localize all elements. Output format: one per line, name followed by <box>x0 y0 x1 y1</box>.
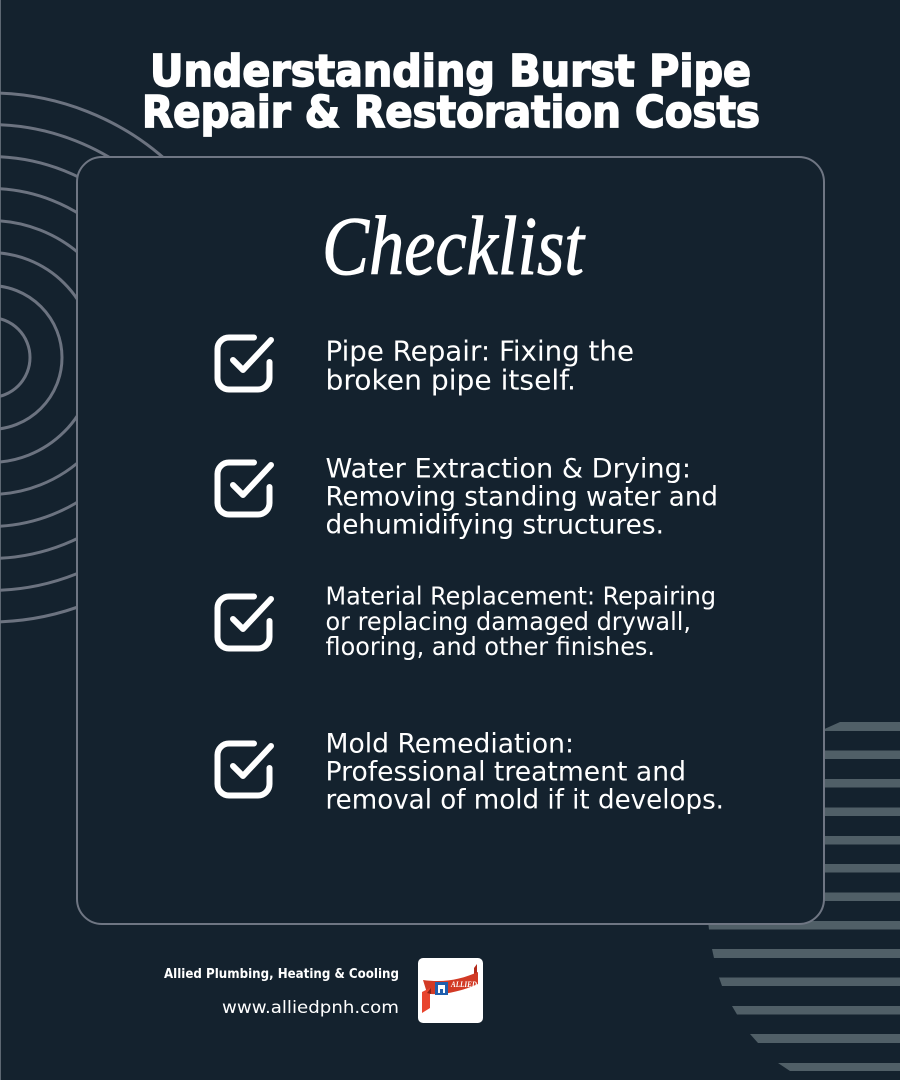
icon: company logo <box>418 958 483 1023</box>
panel: checklist <box>77 157 824 924</box>
text: material replacement: flooring, and other finishes. <box>326 632 655 661</box>
text: pipe repair: Pipe Repair: Fixing the <box>326 334 634 368</box>
text: pipe repair <box>326 334 634 396</box>
icon: checkbox <box>218 596 271 648</box>
text: water extraction: dehumidifying structures. <box>326 510 664 540</box>
text: water extraction <box>326 454 718 540</box>
icon: checkbox <box>218 744 271 796</box>
title <box>142 46 760 138</box>
text: material replacement: or replacing damaged drywall, <box>326 607 691 636</box>
text: material replacement <box>326 582 716 661</box>
heading: Checklist: Checklist <box>322 200 586 293</box>
text: mold remediation: removal of mold if it develops. <box>326 784 724 816</box>
icon: checkbox <box>218 338 271 390</box>
icon: company logo: ALLIED <box>450 979 477 989</box>
icon: checkbox <box>218 462 271 514</box>
checklist item 3 <box>218 582 716 661</box>
decorative concentric arcs <box>0 93 254 622</box>
text: water extraction: Removing standing water and <box>326 482 718 512</box>
checklist item 1 <box>218 334 634 396</box>
decorative striped circle <box>708 722 900 1071</box>
text: material replacement: Material Replacement: Repairing <box>326 582 716 610</box>
title: Understanding Burst Pipe <box>150 46 751 97</box>
text: mold remediation: Mold Remediation: <box>326 728 574 760</box>
footer: company name: Allied Plumbing, Heating & Cooling <box>164 967 399 982</box>
text: water extraction: Water Extraction & Drying: <box>326 454 691 484</box>
text: mold remediation: Professional treatment and <box>326 756 686 788</box>
title: Repair & Restoration Costs <box>142 87 760 138</box>
text: pipe repair: broken pipe itself. <box>326 364 576 396</box>
text: mold remediation <box>326 728 724 816</box>
footer: website: www.alliedpnh.com <box>222 998 399 1018</box>
checklist item 2 <box>218 454 718 540</box>
checklist item 4 <box>218 728 724 816</box>
